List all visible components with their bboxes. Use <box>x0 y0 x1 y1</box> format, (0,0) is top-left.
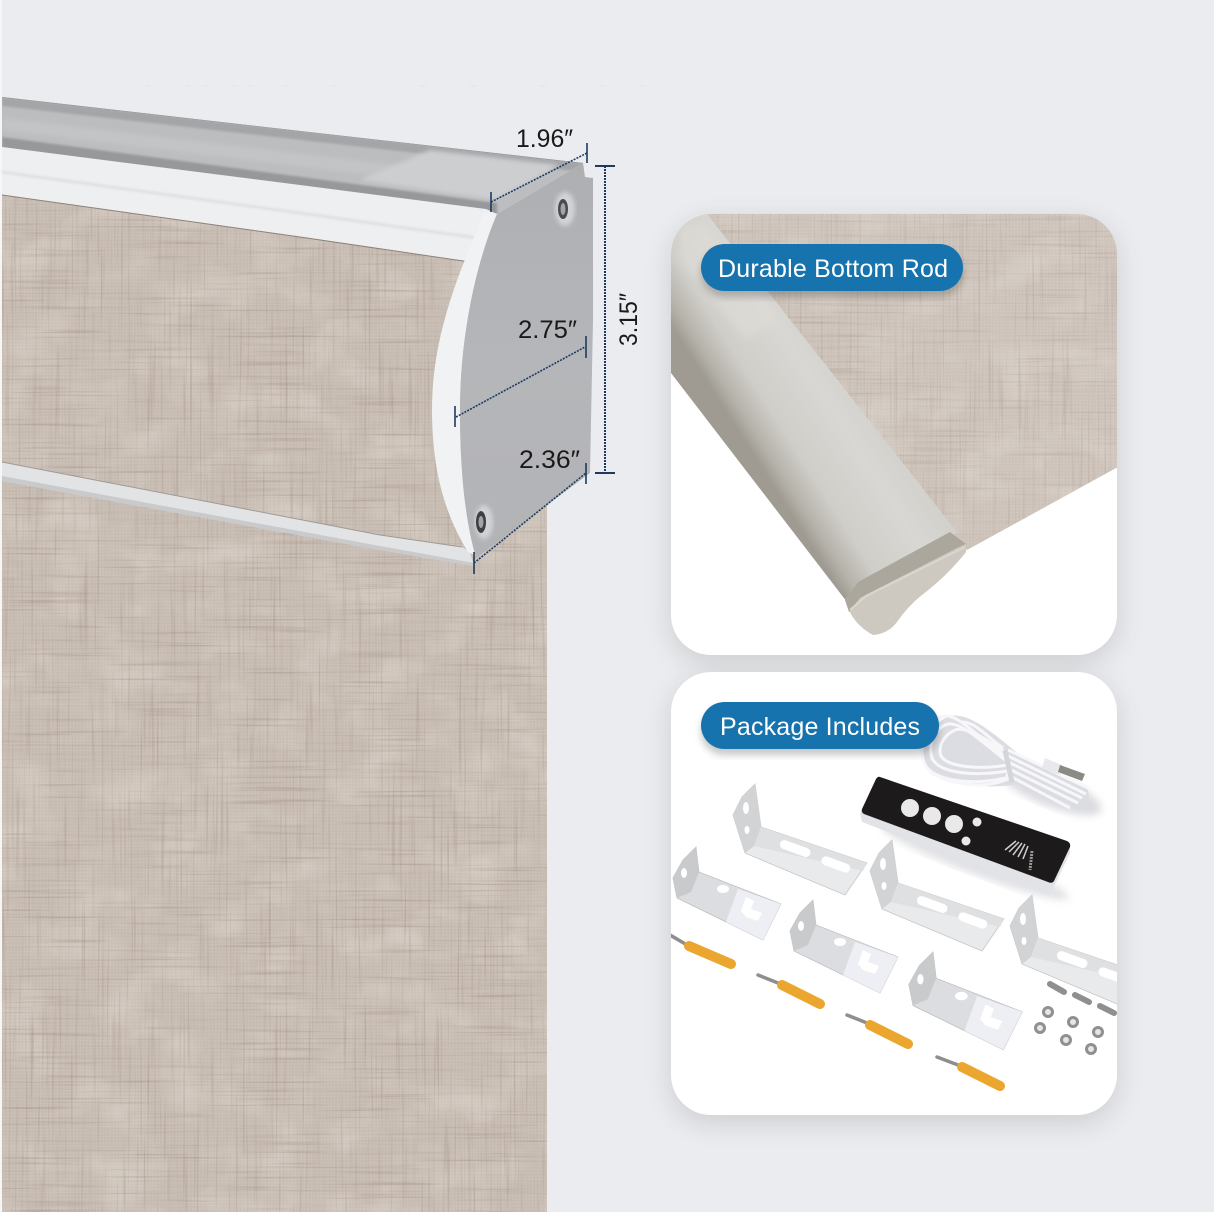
panel: durable bottom rod <box>671 214 1118 655</box>
dimension: 2.75 in <box>455 316 586 427</box>
icon: bottom screw <box>475 505 493 539</box>
wall brackets <box>673 784 1144 1050</box>
bottom rail <box>2 462 474 566</box>
dimension: 2.36 in <box>474 446 586 574</box>
end cap grey face <box>460 163 593 558</box>
label pill: durable bottom rod: Durable Bottom Rod <box>718 255 948 283</box>
anchors and screws <box>670 935 1114 1086</box>
remote control <box>860 777 1073 909</box>
panel: package includes <box>670 672 1144 1115</box>
headrail top <box>2 97 583 214</box>
icon: top screw <box>555 192 575 226</box>
fabric swatch <box>700 214 1118 554</box>
USB cable coil <box>922 716 1107 825</box>
dimension: 1.96 in: 1.96″ <box>516 125 573 153</box>
dimension: 1.96 in <box>491 125 587 212</box>
dimension: 3.15 in <box>595 166 643 473</box>
main fabric shade <box>2 190 547 1212</box>
card shadows <box>671 222 1117 1123</box>
dimension: 3.15 in: 3.15″ <box>615 293 643 346</box>
dimension: 2.36 in: 2.36″ <box>519 446 580 474</box>
dimension: 2.75 in: 2.75″ <box>518 316 577 344</box>
label pill: package includes <box>701 702 939 755</box>
headrail white face <box>2 147 497 262</box>
rod end cap <box>845 532 966 635</box>
label pill: package includes: Package Includes <box>720 713 920 741</box>
label pill: durable bottom rod <box>701 244 963 297</box>
bottom rod <box>671 214 957 602</box>
end cap white band <box>432 212 497 556</box>
